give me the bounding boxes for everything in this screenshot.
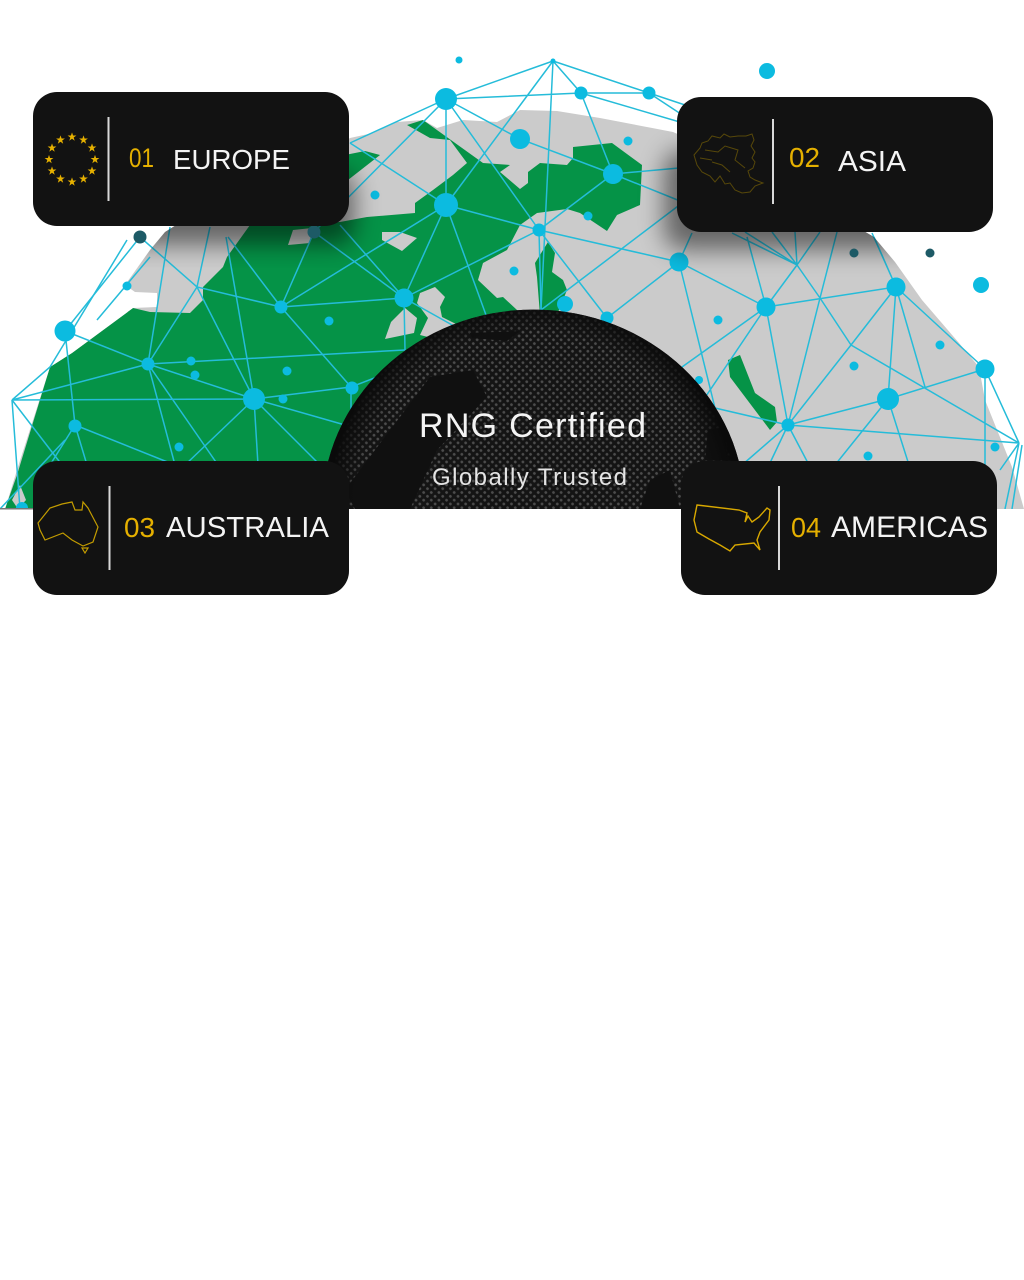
central dark globe (320, 300, 750, 510)
label Australia: AUSTRALIA (166, 512, 330, 544)
card 02 Asia (677, 97, 993, 232)
number 01: 01 (129, 143, 154, 173)
card drop shadows on the map (45, 150, 984, 250)
number 02: 02 (789, 142, 820, 173)
grey lakes and islands on green (12, 228, 458, 509)
globe rim shading (328, 310, 739, 506)
icon: EU star circle (45, 132, 99, 186)
number 04: 04 (791, 512, 821, 543)
green continent shapes (5, 120, 777, 509)
baseline strip (0, 508, 33, 510)
grey land dome (0, 100, 1024, 509)
card 03 Australia (33, 461, 349, 595)
icon: USA outline (694, 505, 770, 551)
globe subheading: Globally Trusted: Globally Trusted (432, 464, 627, 491)
globe heading: RNG Certified: RNG Certified (419, 407, 646, 445)
label Europe: EUROPE (173, 144, 290, 175)
label Americas: AMERICAS (831, 511, 988, 544)
infographic canvas (0, 56, 1024, 595)
card 04 Americas (681, 461, 997, 595)
card 01 Europe (33, 92, 349, 226)
world map dome (0, 100, 1024, 509)
number 03: 03 (124, 512, 155, 543)
network mesh lines (0, 61, 1022, 509)
label Asia: ASIA (838, 146, 907, 178)
shaded nodes under cards (134, 226, 934, 258)
globe base and halftone (320, 300, 750, 510)
icon: Asia outline (694, 134, 763, 193)
network nodes (16, 56, 1000, 514)
icon: Australia outline (38, 502, 98, 553)
dark continents on globe (345, 331, 727, 509)
